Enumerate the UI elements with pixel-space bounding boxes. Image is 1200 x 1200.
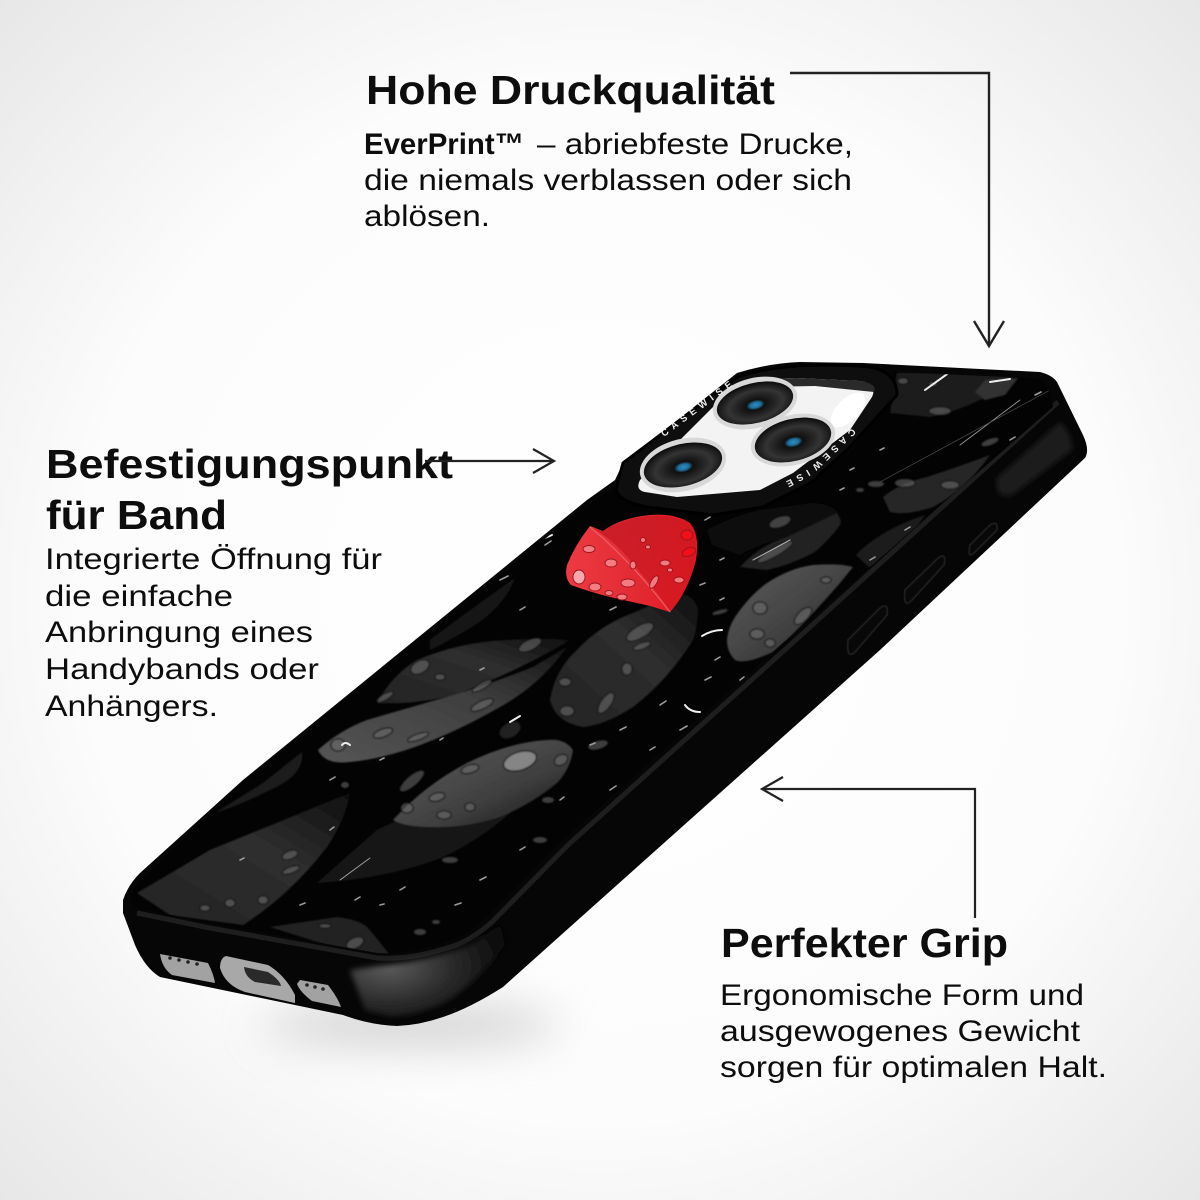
phone case [123, 362, 1087, 1026]
volume up button [905, 556, 945, 603]
brand text top: CASEWISE [662, 380, 732, 436]
callout text: grip: sorgen für optimalen Halt. [720, 1051, 1107, 1084]
callout text: strap attachment [45, 543, 382, 723]
callout text: strap attachment: Anbringung eines [45, 616, 313, 649]
lens top [707, 368, 803, 438]
action button [969, 523, 997, 555]
flash [825, 387, 871, 433]
callout text: print quality: die niemals verblassen oder sich [364, 164, 852, 197]
brand text bottom: CASEWISE [786, 429, 856, 488]
usb port [220, 956, 295, 1003]
water speckles on black [240, 392, 1041, 905]
arrow: strap attachment [425, 449, 554, 473]
camera ring [616, 365, 897, 515]
callout text: grip: Ergonomische Form und [720, 979, 1084, 1012]
callout heading: strap attachment [46, 441, 453, 538]
volume down button [848, 606, 887, 654]
callout text: grip [720, 979, 1107, 1084]
camera island [618, 376, 898, 516]
red leaf [566, 515, 697, 612]
window inner shadow [730, 378, 875, 392]
camera window [638, 378, 874, 497]
case body silhouette [123, 362, 1087, 1026]
corner sheen [350, 925, 505, 1016]
callout heading: strap attachment: für Band [46, 492, 227, 538]
arrow: grip [762, 777, 975, 918]
case artwork: black leaves with rain drops [120, 360, 1080, 970]
callout heading: strap attachment: Befestigungspunkt [46, 441, 453, 487]
water drops [200, 378, 999, 951]
lens left [634, 429, 732, 501]
callout text: strap attachment: Integrierte Öffnung für [45, 543, 382, 576]
callout text: print quality: EverPrint™ [364, 128, 524, 161]
artwork base [938, 404, 1053, 508]
bright specular glints [340, 372, 1050, 880]
grey leaves [137, 373, 1018, 955]
callout text: print quality: ablösen. [364, 200, 490, 233]
callout text: grip: ausgewogenes Gewicht [720, 1015, 1081, 1048]
left speaker [160, 954, 215, 983]
callout text: strap attachment: Anhängers. [45, 690, 218, 723]
callout text: print quality: – abriebfeste Drucke, [537, 128, 853, 161]
callout heading: print quality: Hohe Druckqualität [366, 67, 775, 113]
side panel highlight [997, 422, 1072, 496]
callout text: print quality [364, 128, 853, 233]
arrow: print quality [790, 73, 1004, 346]
lens right [745, 405, 841, 475]
callout heading: grip: Perfekter Grip [721, 920, 1008, 966]
callout text: strap attachment: die einfache [45, 580, 233, 613]
right speaker [297, 980, 341, 1007]
phone shadow [260, 1003, 560, 1047]
rim highlight [137, 402, 1058, 958]
callout text: strap attachment: Handybands oder [45, 653, 319, 686]
